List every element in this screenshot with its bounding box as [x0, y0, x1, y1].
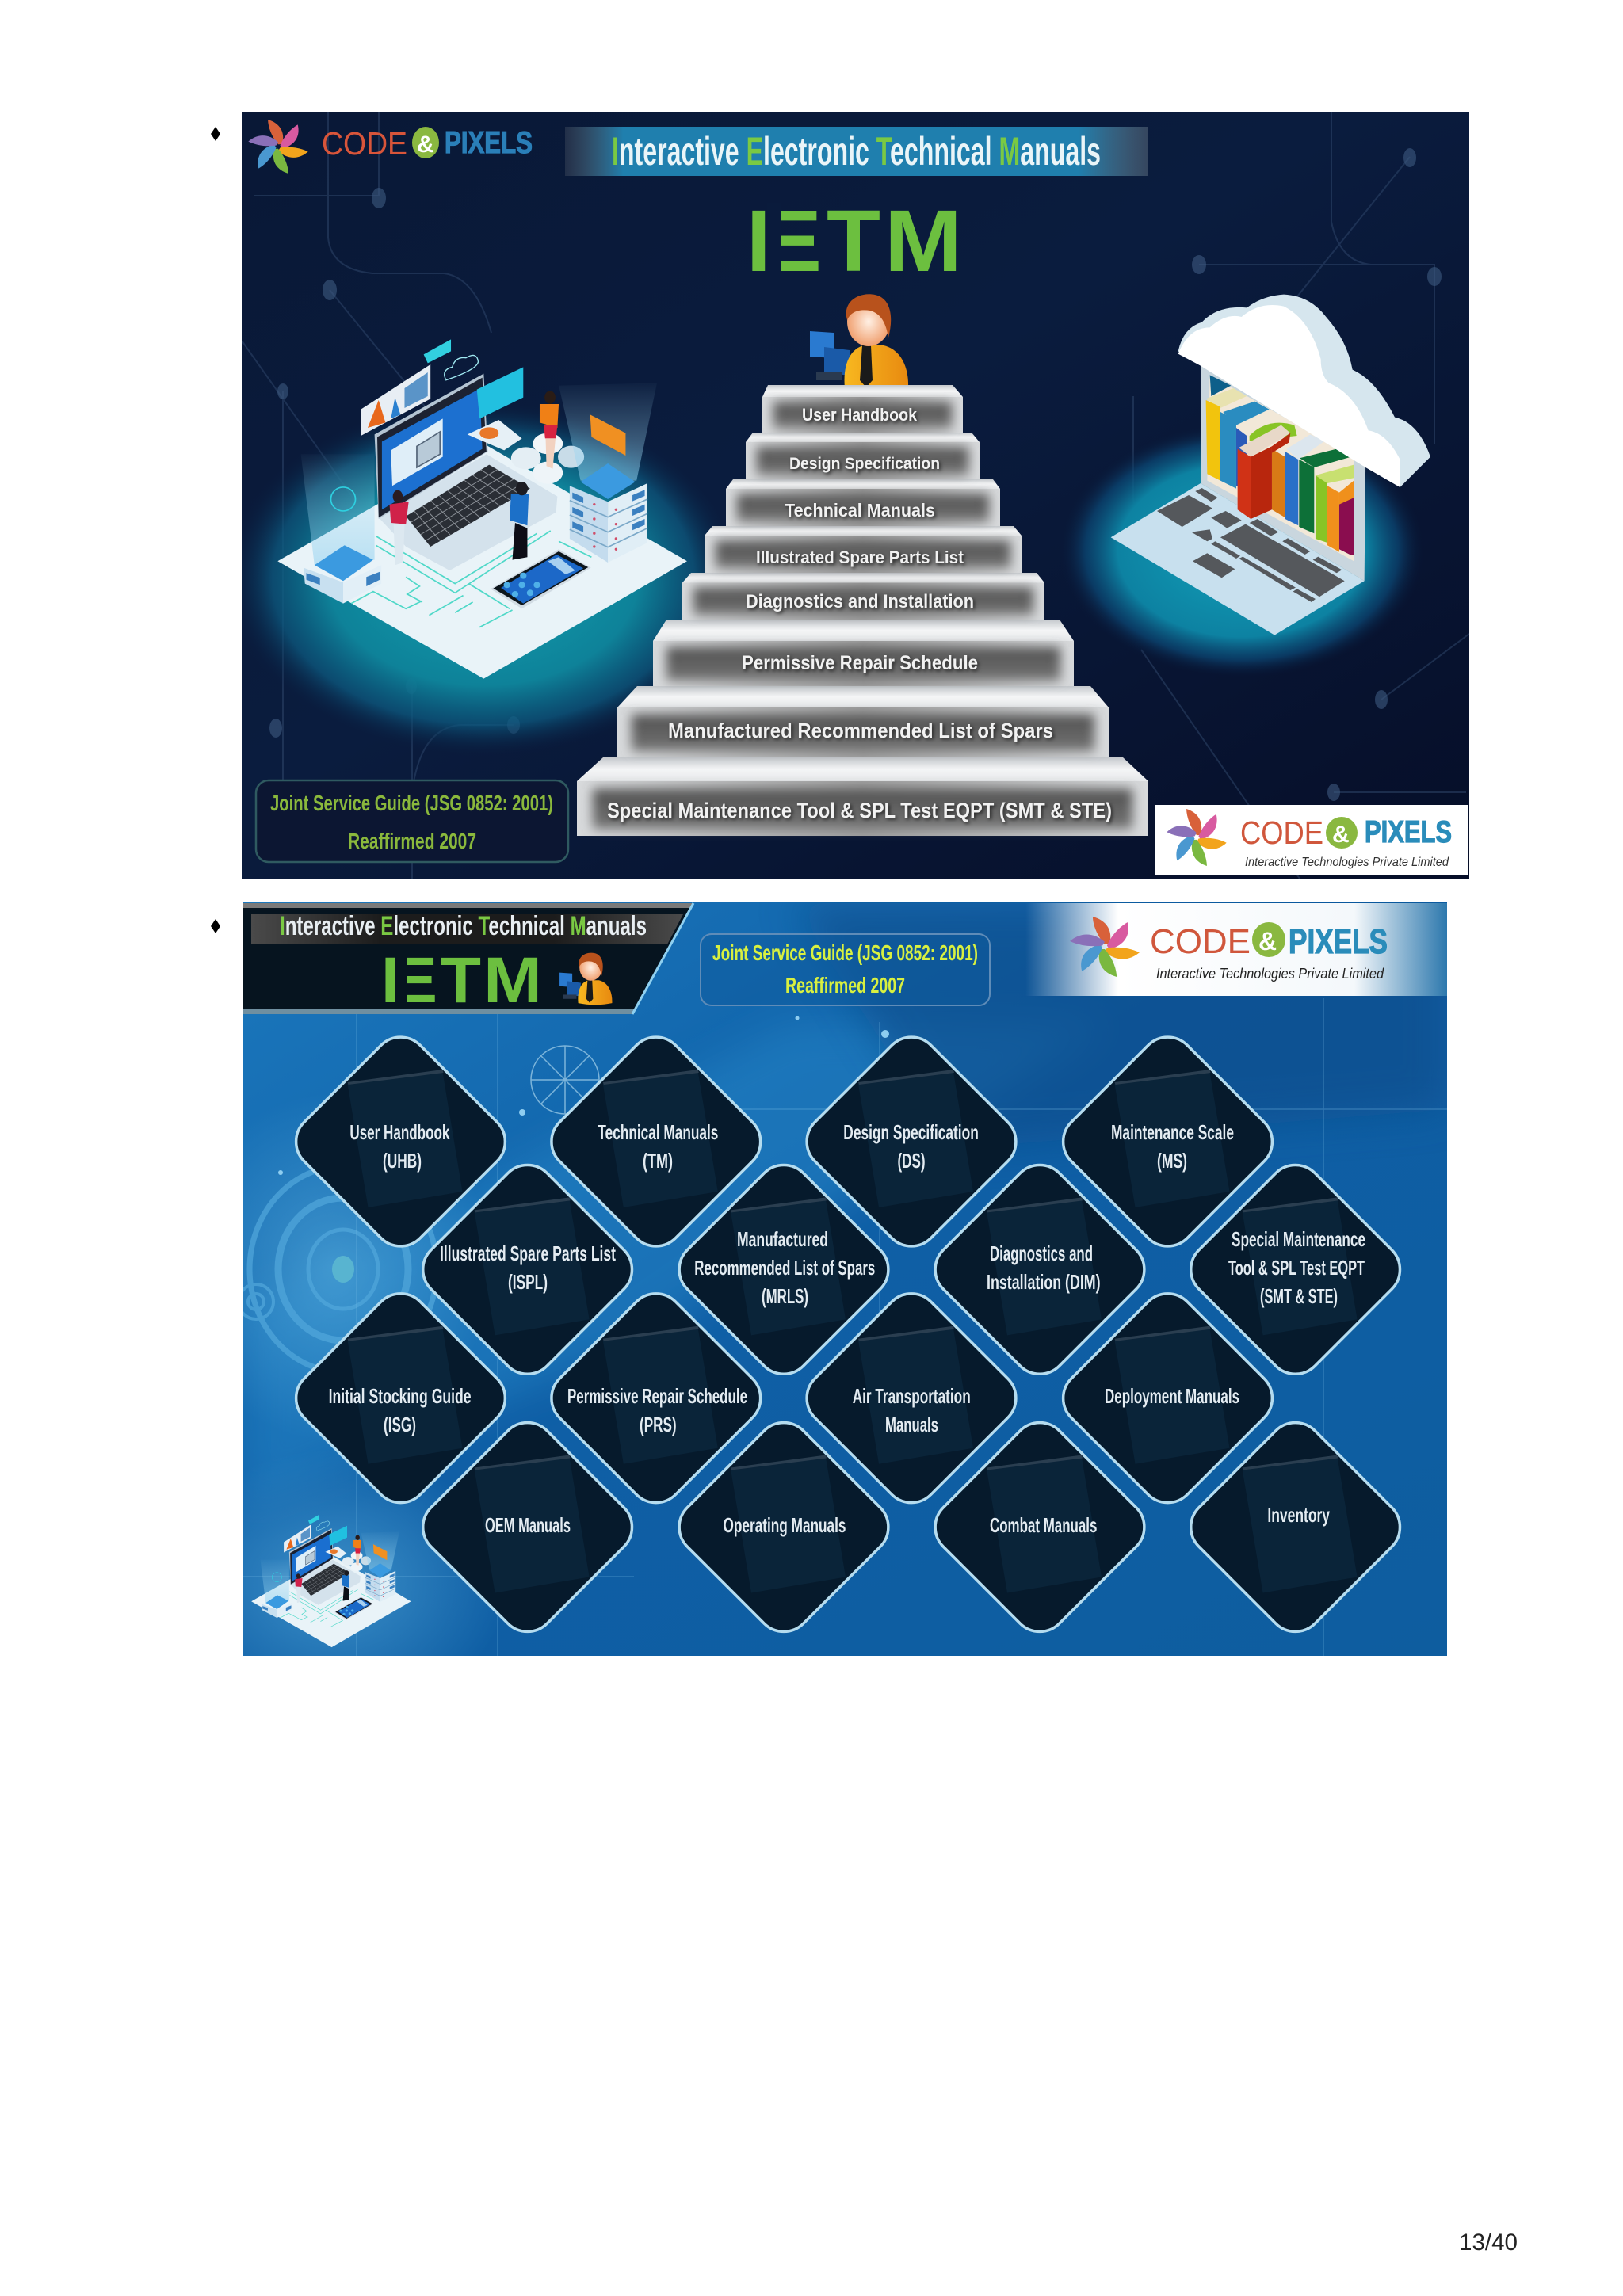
logo: Code & Pixels bottom-right [1155, 805, 1468, 875]
panel: IETM staircase slide [226, 112, 1469, 879]
IETM logo [752, 211, 956, 271]
small IETM logo: T [441, 944, 481, 1016]
diamond: Air Transportation Manuals: Manuals [885, 1413, 938, 1436]
icon: isometric laptop scene [277, 339, 687, 679]
left glow [244, 413, 711, 745]
header title text: Interactive Electronic Technical Manuals [280, 911, 647, 941]
diamond: Design Specification: Design Specification [843, 1120, 979, 1144]
small IETM logo [381, 944, 542, 1016]
logo: Code & Pixels bottom-right: PIXELS [1365, 815, 1452, 849]
diamond: Maintenance Scale [1052, 1026, 1284, 1257]
diamond: Special Maintenance Tool: Special Maintenance [1232, 1227, 1365, 1251]
callout: Joint Service Guide yellow: Joint Service Guide (JSG 0852: 2001) [712, 940, 978, 965]
logo: Code & Pixels top-left [248, 120, 533, 174]
diamond: User Handbook: User Handbook [349, 1120, 450, 1144]
diamond: User Handbook: (UHB) [383, 1149, 422, 1173]
diamond: Initial Stocking Guide [285, 1282, 517, 1514]
diamond: Technical Manuals: (TM) [643, 1149, 673, 1173]
diamond: Maintenance Scale: Maintenance Scale [1111, 1120, 1234, 1144]
callout: Joint Service Guide yellow [701, 934, 990, 1005]
title text: Interactive Electronic Technical Manuals [612, 129, 1101, 174]
diamond: Design Specification [796, 1026, 1027, 1257]
diamond: Initial Stocking Guide: Initial Stocking Guide [329, 1384, 472, 1408]
diamond: Illustrated Spare Parts List: (ISPL) [508, 1270, 548, 1294]
diamond: Combat Manuals: Combat Manuals [990, 1513, 1097, 1537]
diamond: Technical Manuals: Technical Manuals [598, 1120, 718, 1144]
logo: Code & Pixels header [1025, 903, 1447, 996]
IETM logo: T [827, 193, 880, 290]
step: Technical Manuals [726, 479, 1000, 526]
logo: Code & Pixels header: PIXELS [1289, 922, 1388, 961]
diamond: Special Maintenance Tool: Tool & SPL Test EQPT [1228, 1256, 1365, 1280]
diamond: Technical Manuals [540, 1026, 772, 1257]
small IETM logo: E [393, 944, 437, 1016]
diamond: Air Transportation Manuals: Air Transportation [853, 1384, 971, 1408]
diamond: Deployment Manuals: Deployment Manuals [1105, 1384, 1239, 1408]
diamond: Operating Manuals: Operating Manuals [723, 1513, 846, 1537]
header block [243, 903, 693, 1016]
logo: Code & Pixels header: & [1258, 927, 1277, 955]
circuit background [242, 112, 1469, 879]
step: Manufactured Recommended [617, 686, 1109, 757]
diamond: Combat Manuals [924, 1411, 1155, 1643]
small IETM logo: M [483, 944, 542, 1016]
logo: Code & Pixels header: CODE [1150, 922, 1251, 961]
step: Design Specification: Design Specification [789, 455, 940, 473]
step: Design Specification [746, 433, 980, 479]
logo: Code & Pixels top-left: & [417, 132, 434, 158]
IETM logo: M [884, 193, 962, 290]
callout: Joint Service Guide yellow: Reaffirmed 2007 [785, 973, 905, 997]
diamond: Illustrated Spare Parts List: Illustrated Spare Parts List [440, 1241, 616, 1265]
logo: Code & Pixels top-left: PIXELS [445, 126, 533, 160]
diamond: Inventory: Inventory [1267, 1503, 1330, 1527]
diamond: Initial Stocking Guide: (ISG) [384, 1413, 416, 1436]
icon: cloud laptop with books [1111, 295, 1430, 635]
diamond grid [285, 1026, 1411, 1643]
logo: Code & Pixels bottom-right: CODE [1240, 814, 1323, 851]
diamond: Manufactured Recommended List of Spars: Recommended List of Spars [694, 1256, 875, 1280]
diamond: Diagnostics and Installation: Diagnostics and [990, 1241, 1093, 1265]
diamond: Diagnostics and Installation: Installation (DIM) [987, 1270, 1101, 1294]
bullet 2 [211, 919, 220, 933]
icon: small isometric scene [251, 1515, 411, 1647]
step: Illustrated: Illustrated Spare Parts List [756, 547, 964, 567]
diamond: OEM Manuals [411, 1411, 643, 1643]
step: Manufactured Recommended: Manufactured Recommended List of Spars [668, 719, 1053, 742]
logo: Code & Pixels bottom-right: & [1332, 822, 1350, 848]
diamond: Permissive Repair Schedule: (PRS) [640, 1413, 677, 1436]
diamond: Illustrated Spare Parts List [411, 1154, 643, 1386]
diamond: Inventory [1179, 1411, 1411, 1643]
IETM logo: I [747, 193, 771, 290]
panel: IETM manuals grid slide [158, 902, 1447, 1719]
diamond: Permissive Repair Schedule [540, 1282, 772, 1514]
diamond: Manufactured Recommended List of Spars: Manufactured [737, 1227, 828, 1251]
diamond: Design Specification: (DS) [897, 1149, 926, 1173]
logo: Code & Pixels top-left: CODE [322, 125, 407, 162]
IETM logo: E [762, 193, 822, 290]
logo: Code & Pixels bottom-right: Interactive Technologies Private Limited [1245, 856, 1449, 869]
diamond: Deployment Manuals [1052, 1282, 1284, 1514]
diamond: Operating Manuals [668, 1411, 899, 1643]
step: Special Maintenance: Special Maintenance Tool & SPL Test EQPT (SMT & STE) [607, 799, 1112, 822]
diamond: Special Maintenance Tool: (SMT & STE) [1260, 1284, 1338, 1308]
diamond: Maintenance Scale: (MS) [1157, 1149, 1187, 1173]
diamond: Permissive Repair Schedule: Permissive Repair Schedule [567, 1384, 747, 1408]
callout: Joint Service Guide: Reaffirmed 2007 [348, 829, 476, 853]
step: Permissive Repair [653, 620, 1074, 686]
step: Diagnostics: Diagnostics and Installation [746, 591, 974, 612]
diamond: Air Transportation Manuals [796, 1282, 1027, 1514]
diamond: Manufactured Recommended List of Spars [668, 1154, 899, 1386]
callout: Joint Service Guide: Joint Service Guide (JSG 0852: 2001) [270, 791, 553, 815]
logo: Code & Pixels header: Interactive Technologies Private Limited [1156, 966, 1384, 982]
icon: person at computer [810, 294, 908, 391]
diamond: Special Maintenance Tool [1179, 1154, 1411, 1386]
step: Special Maintenance [577, 757, 1148, 836]
diamond: Diagnostics and Installation [924, 1154, 1155, 1386]
diamond: User Handbook [285, 1026, 517, 1257]
small IETM logo: I [381, 944, 399, 1016]
callout: Joint Service Guide [256, 780, 568, 862]
icon: person small [559, 953, 612, 1005]
step: User Handbook: User Handbook [802, 405, 918, 425]
page number: 13/40 [1459, 2229, 1518, 2256]
bullet 1 [211, 127, 220, 141]
staircase [577, 385, 1148, 836]
step: User Handbook [762, 385, 963, 433]
step: Diagnostics [682, 573, 1044, 620]
right glow [1070, 435, 1415, 670]
title bar [565, 127, 1148, 176]
diamond: OEM Manuals: OEM Manuals [485, 1513, 571, 1537]
background decorations [158, 903, 1447, 1719]
step: Illustrated [705, 526, 1022, 573]
step: Permissive Repair: Permissive Repair Schedule [742, 652, 978, 674]
diamond: Manufactured Recommended List of Spars: (MRLS) [762, 1284, 808, 1308]
step: Technical Manuals: Technical Manuals [785, 500, 935, 521]
